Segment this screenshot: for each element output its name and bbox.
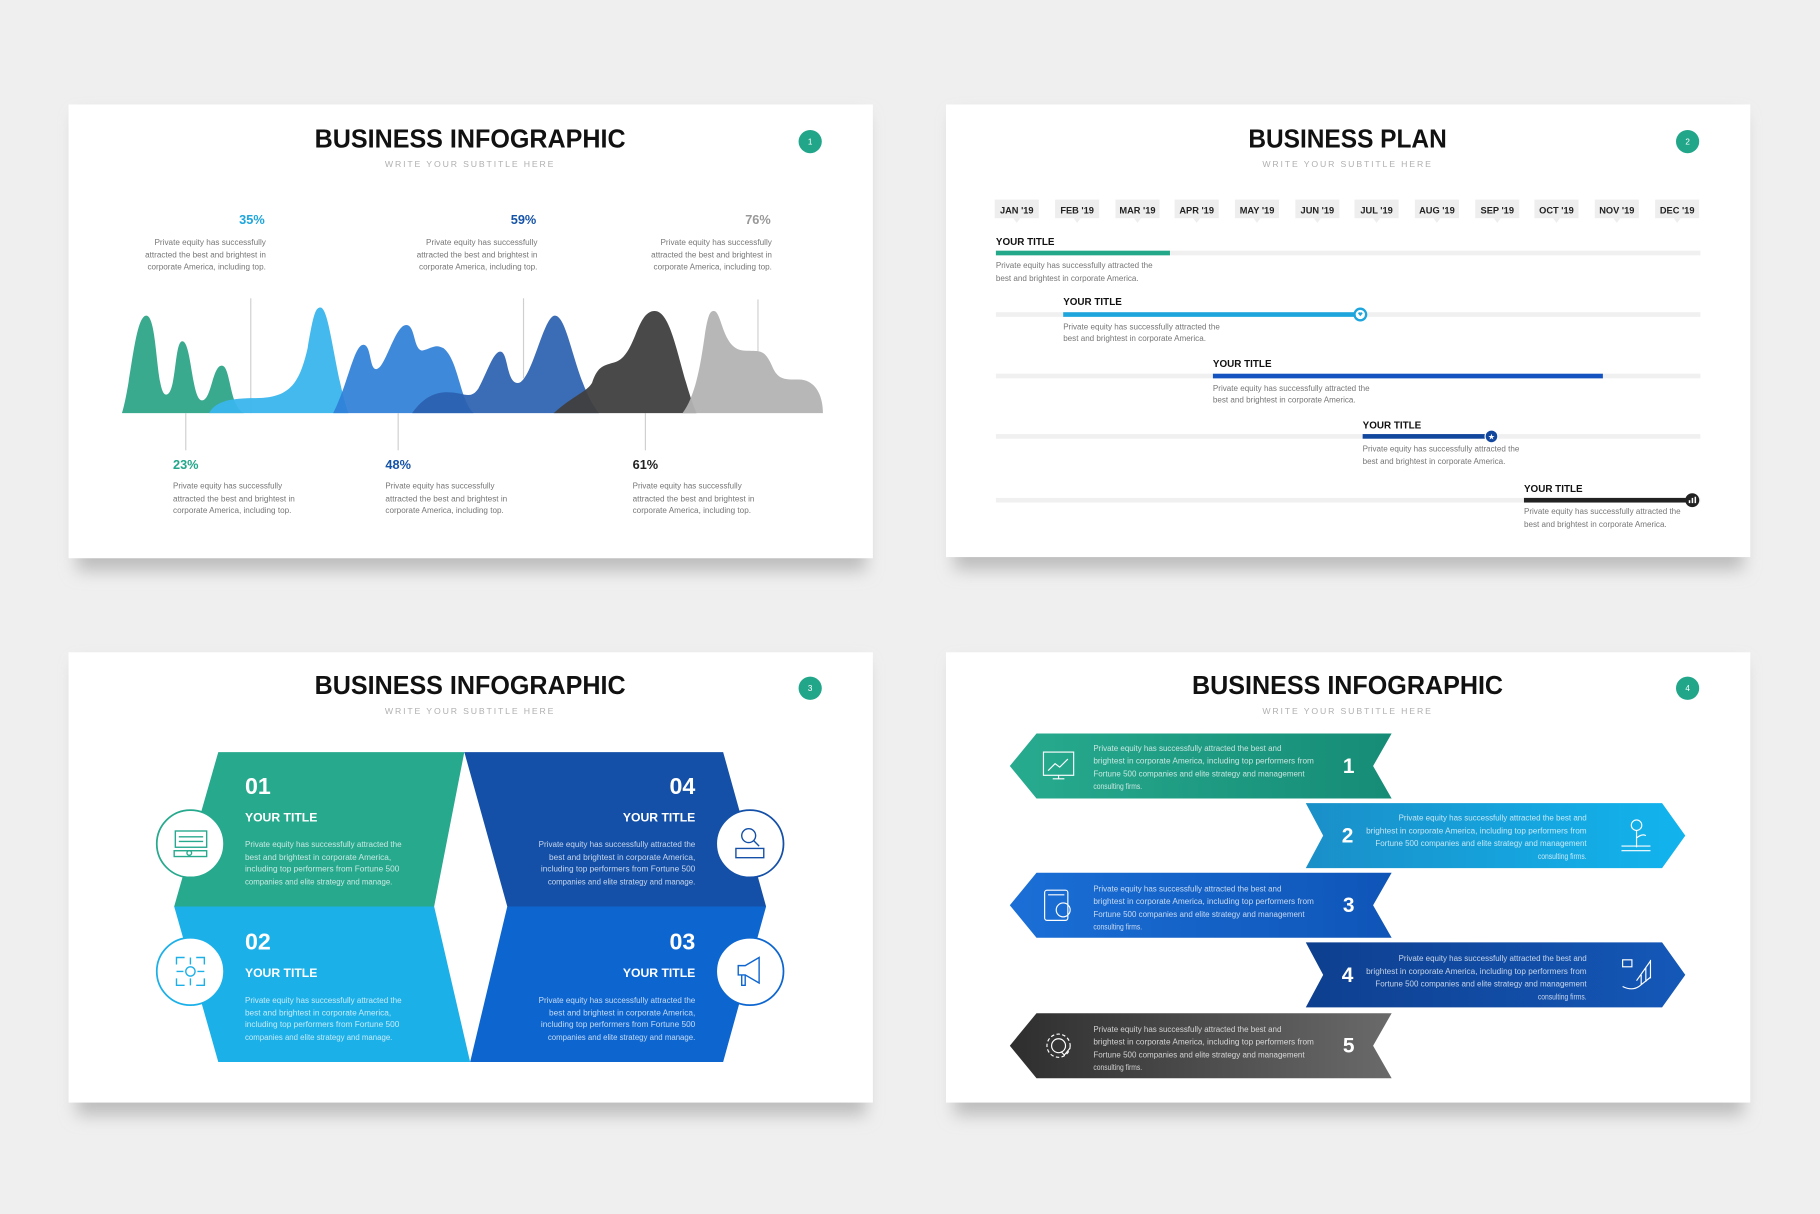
stat: 76%: Private equity has successfully (660, 238, 773, 247)
row 3: best and brightest in corporate America. (1213, 396, 1356, 405)
arrow 3 (1010, 873, 1392, 938)
row 2 (1063, 297, 1366, 343)
arrow 1: Fortune 500 companies and elite strategy and management (1093, 769, 1305, 778)
stat: 61%: corporate America, including top. (633, 506, 751, 515)
stat: 61%: Private equity has successfully (633, 482, 743, 491)
arrow 5: Fortune 500 companies and elite strategy and management (1093, 1050, 1305, 1059)
icon: megaphone (716, 938, 783, 1005)
arrow 3: consulting firms. (1093, 923, 1142, 932)
tracks (996, 251, 1700, 503)
icon: search (716, 810, 783, 877)
stat: 48%: attracted the best and brightest in (385, 494, 507, 503)
quadrant 01: YOUR TITLE (245, 811, 317, 825)
stat: 59%: corporate America, including top. (419, 262, 537, 271)
arrow 2: Private equity has successfully attracted the best and (1399, 814, 1587, 823)
quadrant 03 (470, 906, 766, 1062)
arrow 2: Fortune 500 companies and elite strategy and management (1375, 839, 1587, 848)
arrow 1: consulting firms. (1093, 782, 1142, 791)
arrow 3: 3 (1343, 894, 1355, 917)
quadrant 01: 01 (245, 773, 271, 799)
month labels: FEB '19 (1060, 206, 1094, 216)
quadrant 04: 04 (669, 773, 695, 799)
month labels: OCT '19 (1539, 206, 1574, 216)
quadrant 01: including top performers from Fortune 500 (245, 865, 400, 874)
arrow 1 (1010, 734, 1392, 799)
panel: 1 chart (69, 104, 873, 571)
quadrant 02: including top performers from Fortune 500 (245, 1020, 400, 1029)
stat: 48%: Private equity has successfully (385, 482, 495, 491)
title: BUSINESS INFOGRAPHIC (315, 125, 626, 153)
subtitle: WRITE YOUR SUBTITLE HERE (385, 159, 555, 169)
quadrant 02: companies and elite strategy and manage. (245, 1033, 392, 1042)
row 2: Private equity has successfully attracted the (1063, 323, 1220, 332)
quadrant 04 (464, 752, 766, 906)
arrow 3: brightest in corporate America, including top performers from (1093, 897, 1314, 906)
badge: 1 (808, 137, 813, 146)
stat: 48%: 48% (385, 457, 411, 472)
stat: 76%: corporate America, including top. (654, 262, 772, 271)
subtitle: WRITE YOUR SUBTITLE HERE (1262, 706, 1433, 716)
month labels: SEP '19 (1481, 206, 1514, 216)
row 5: YOUR TITLE (1524, 484, 1583, 495)
stat: 23%: Private equity has successfully (173, 482, 283, 491)
stat: 76% (651, 212, 773, 271)
arrow 5: brightest in corporate America, including top performers from (1093, 1038, 1314, 1047)
arrow 5: Private equity has successfully attracted the best and (1093, 1025, 1281, 1034)
stat: 35%: 35% (239, 212, 265, 227)
title: BUSINESS INFOGRAPHIC (315, 672, 626, 700)
row 4: best and brightest in corporate America. (1363, 457, 1505, 466)
arrow 2: brightest in corporate America, including top performers from (1366, 826, 1587, 835)
badge: 4 (1685, 684, 1690, 693)
quadrant 02: Private equity has successfully attracted the (245, 996, 402, 1005)
arrow 4: brightest in corporate America, including top performers from (1366, 967, 1587, 976)
row 5: Private equity has successfully attracted the (1524, 507, 1681, 516)
row 2: YOUR TITLE (1063, 297, 1122, 308)
row 3: Private equity has successfully attracted the (1213, 384, 1370, 393)
quadrant 03: companies and elite strategy and manage. (548, 1033, 695, 1042)
month labels (995, 200, 1699, 223)
quadrant 03: Private equity has successfully attracted the (539, 996, 696, 1005)
row 1 (996, 237, 1170, 283)
title: BUSINESS PLAN (1248, 125, 1447, 153)
arrow 4: 4 (1342, 964, 1354, 987)
stat: 76%: attracted the best and brightest in (651, 251, 772, 260)
stat: 61%: attracted the best and brightest in (633, 494, 754, 503)
month labels: JUL '19 (1360, 206, 1393, 216)
quadrant 02: best and brightest in corporate America, (245, 1009, 391, 1018)
quadrant 04: including top performers from Fortune 500 (541, 865, 696, 874)
stat: 35%: corporate America, including top. (147, 262, 266, 271)
title: BUSINESS INFOGRAPHIC (1192, 672, 1503, 700)
quadrant 02: YOUR TITLE (245, 966, 317, 980)
stat: 35%: attracted the best and brightest in (145, 251, 266, 260)
quadrant 02: 02 (245, 928, 271, 954)
row 1: Private equity has successfully attracted the (996, 261, 1153, 270)
row 4: Private equity has successfully attracted the (1363, 444, 1520, 453)
arrow 1: 1 (1343, 755, 1355, 778)
stat: 48%: corporate America, including top. (385, 506, 504, 515)
arrow 2 (1306, 803, 1685, 868)
month labels: NOV '19 (1599, 206, 1634, 216)
arrow 4 (1306, 942, 1685, 1007)
row 3: YOUR TITLE (1213, 359, 1272, 370)
icon: keyboard (157, 810, 224, 877)
stat: 76%: 76% (745, 212, 771, 227)
badge: 2 (1685, 137, 1690, 146)
arrow 2: consulting firms. (1538, 852, 1587, 861)
arrow 3: Private equity has successfully attracted the best and (1093, 884, 1281, 893)
quadrant 02 (174, 906, 470, 1062)
stat: 48% (385, 457, 507, 515)
row 5 (1524, 484, 1699, 529)
panel: 3 four quadrants (69, 652, 873, 1115)
arrow 5: 5 (1343, 1035, 1355, 1058)
quadrant 04: Private equity has successfully attracted the (539, 840, 696, 849)
arrow 5 (1010, 1013, 1392, 1078)
arrow 2: 2 (1342, 825, 1353, 848)
quadrant 01: companies and elite strategy and manage. (245, 877, 392, 886)
wave chart (122, 308, 823, 413)
badge (799, 677, 822, 700)
stat: 59% (417, 212, 538, 271)
month labels: MAR '19 (1119, 206, 1156, 216)
row 4: ★ (1488, 432, 1495, 441)
row 4: YOUR TITLE (1363, 420, 1422, 431)
quadrant 04: companies and elite strategy and manage. (548, 877, 695, 886)
quadrant 01 (174, 752, 464, 906)
quadrant 03: YOUR TITLE (623, 966, 695, 980)
panel: 4 arrow list (946, 652, 1750, 1115)
quadrant 03: best and brightest in corporate America, (549, 1009, 695, 1018)
month labels: DEC '19 (1660, 206, 1694, 216)
badge (1676, 130, 1699, 153)
lines (186, 298, 758, 450)
stat: 35%: Private equity has successfully (154, 238, 267, 247)
arrow 4: consulting firms. (1538, 992, 1587, 1001)
arrow 3: Fortune 500 companies and elite strategy and management (1093, 910, 1305, 919)
row 4 (1363, 420, 1520, 466)
month labels: JUN '19 (1301, 206, 1334, 216)
month labels: AUG '19 (1419, 206, 1455, 216)
stat: 61% (633, 457, 754, 515)
stat: 23%: corporate America, including top. (173, 506, 291, 515)
badge (1676, 677, 1699, 700)
badge: 3 (808, 684, 813, 693)
quadrant 03: 03 (669, 928, 695, 954)
stat: 59%: 59% (511, 212, 536, 227)
icon: target (157, 938, 224, 1005)
stat: 61%: 61% (633, 457, 658, 472)
quadrant 04: best and brightest in corporate America, (549, 853, 695, 862)
arrow 1: Private equity has successfully attracted the best and (1093, 744, 1281, 753)
stat: 23% (173, 457, 295, 515)
row 1: best and brightest in corporate America. (996, 274, 1139, 283)
subtitle: WRITE YOUR SUBTITLE HERE (1262, 159, 1433, 169)
quadrant 01: Private equity has successfully attracted the (245, 840, 402, 849)
month labels: MAY '19 (1240, 206, 1274, 216)
subtitle: WRITE YOUR SUBTITLE HERE (385, 706, 555, 716)
stat: 59%: Private equity has successfully (426, 238, 538, 247)
badge (799, 130, 822, 153)
arrow 4: Fortune 500 companies and elite strategy and management (1375, 980, 1587, 989)
month labels: JAN '19 (1000, 206, 1034, 216)
arrow 5: consulting firms. (1093, 1063, 1142, 1072)
stat: 59%: attracted the best and brightest in (417, 251, 537, 260)
arrow 1: brightest in corporate America, including top performers from (1093, 757, 1314, 766)
stat: 23%: attracted the best and brightest in (173, 494, 295, 503)
stat: 23%: 23% (173, 457, 199, 472)
quadrant 03: including top performers from Fortune 500 (541, 1020, 696, 1029)
arrow 4: Private equity has successfully attracted the best and (1399, 954, 1587, 963)
row 5: best and brightest in corporate America. (1524, 520, 1667, 529)
quadrant 04: YOUR TITLE (623, 811, 695, 825)
row 1: YOUR TITLE (996, 237, 1055, 248)
row 2: best and brightest in corporate America. (1063, 334, 1206, 343)
stat: 35% (145, 212, 267, 271)
row 3 (1213, 359, 1603, 405)
month labels: APR '19 (1179, 206, 1214, 216)
quadrant 01: best and brightest in corporate America, (245, 853, 391, 862)
panel: 2 business plan (946, 104, 1750, 570)
